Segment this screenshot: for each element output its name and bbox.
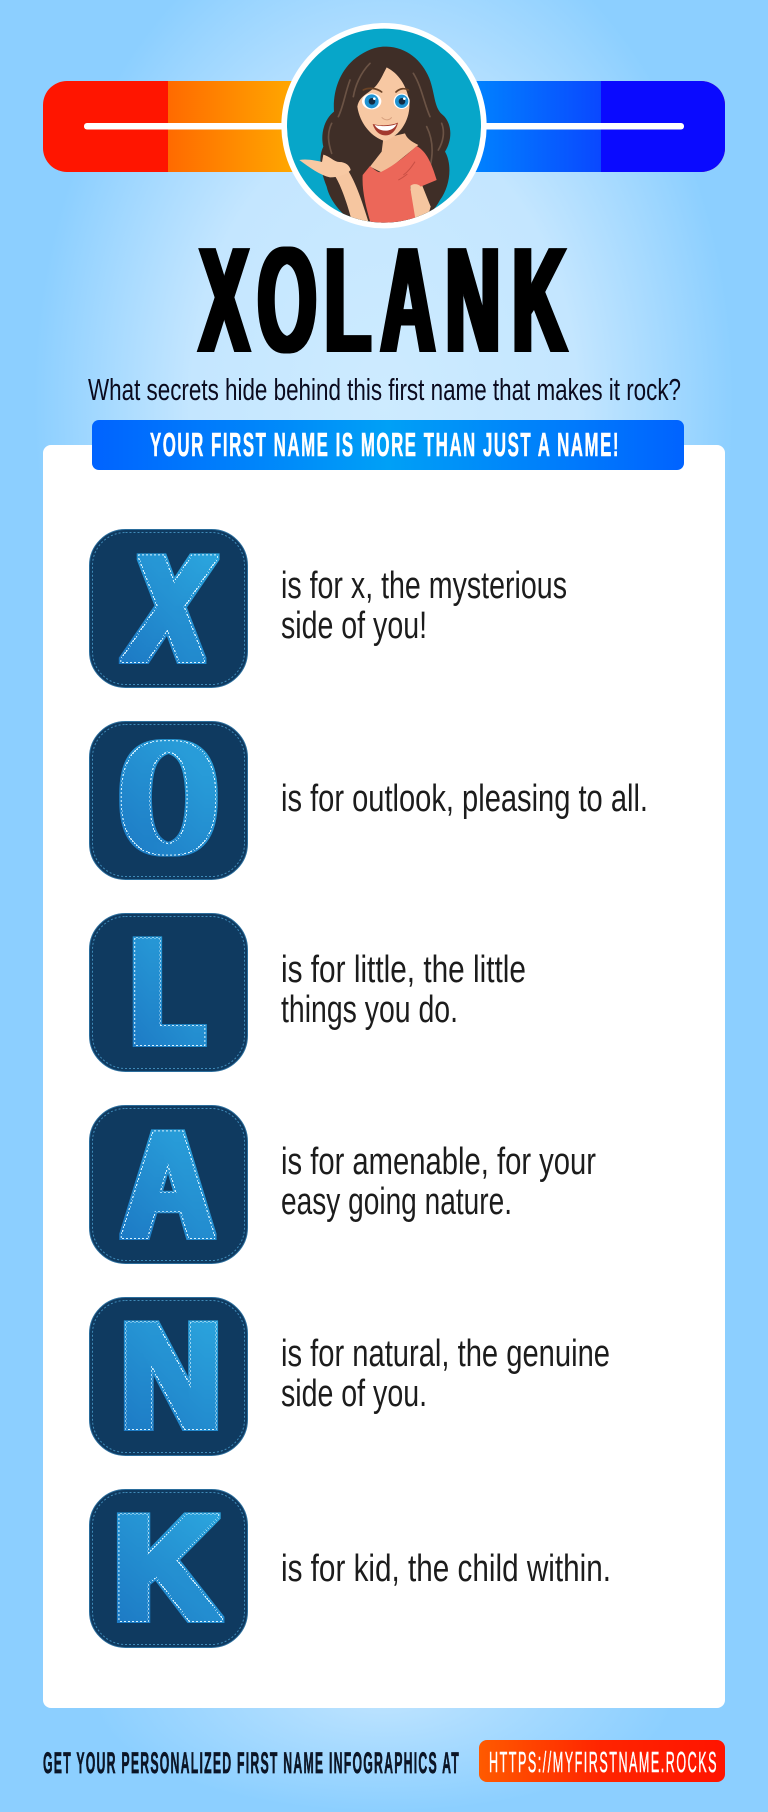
icon: letter N <box>90 1291 248 1461</box>
text: L meaning: things you do. <box>281 989 458 1031</box>
letter row A <box>90 1100 596 1270</box>
icon: letter O: O <box>119 704 218 888</box>
letter row N <box>90 1291 610 1461</box>
letter row X <box>90 524 567 694</box>
title: XOLANK <box>199 217 567 385</box>
icon: letter X <box>90 524 248 694</box>
text: A meaning <box>281 1141 596 1223</box>
text: X meaning: side of you! <box>281 605 427 647</box>
letter row O <box>90 704 648 888</box>
text: A meaning: is for amenable, for your <box>281 1141 596 1183</box>
letter row L <box>90 907 526 1077</box>
text: N meaning: side of you. <box>281 1373 427 1415</box>
banner <box>92 420 684 470</box>
text: X meaning <box>281 565 567 647</box>
panel: letters <box>43 445 725 1708</box>
icon: letter K <box>90 1483 248 1653</box>
footer url button <box>479 1740 725 1782</box>
text: L meaning <box>281 949 526 1031</box>
icon: letter K: K <box>113 1483 220 1653</box>
text: O meaning: is for outlook, pleasing to all. <box>281 778 648 820</box>
icon: letter N: N <box>120 1291 222 1461</box>
text: N meaning: is for natural, the genuine <box>281 1333 610 1375</box>
text: K meaning: is for kid, the child within. <box>281 1548 611 1590</box>
icon: letter X: X <box>125 524 214 694</box>
header colour bar <box>43 81 725 172</box>
letter row K <box>90 1483 611 1653</box>
icon: woman portrait <box>281 23 487 228</box>
text: L meaning: is for little, the little <box>281 949 526 991</box>
icon: letter A: A <box>122 1100 214 1270</box>
text: N meaning <box>281 1333 610 1415</box>
text: X meaning: is for x, the mysterious <box>281 565 567 607</box>
text: A meaning: easy going nature. <box>281 1181 512 1223</box>
icon: letter L: L <box>131 907 205 1077</box>
icon: letter L <box>90 907 248 1077</box>
icon: letter A <box>90 1100 248 1270</box>
